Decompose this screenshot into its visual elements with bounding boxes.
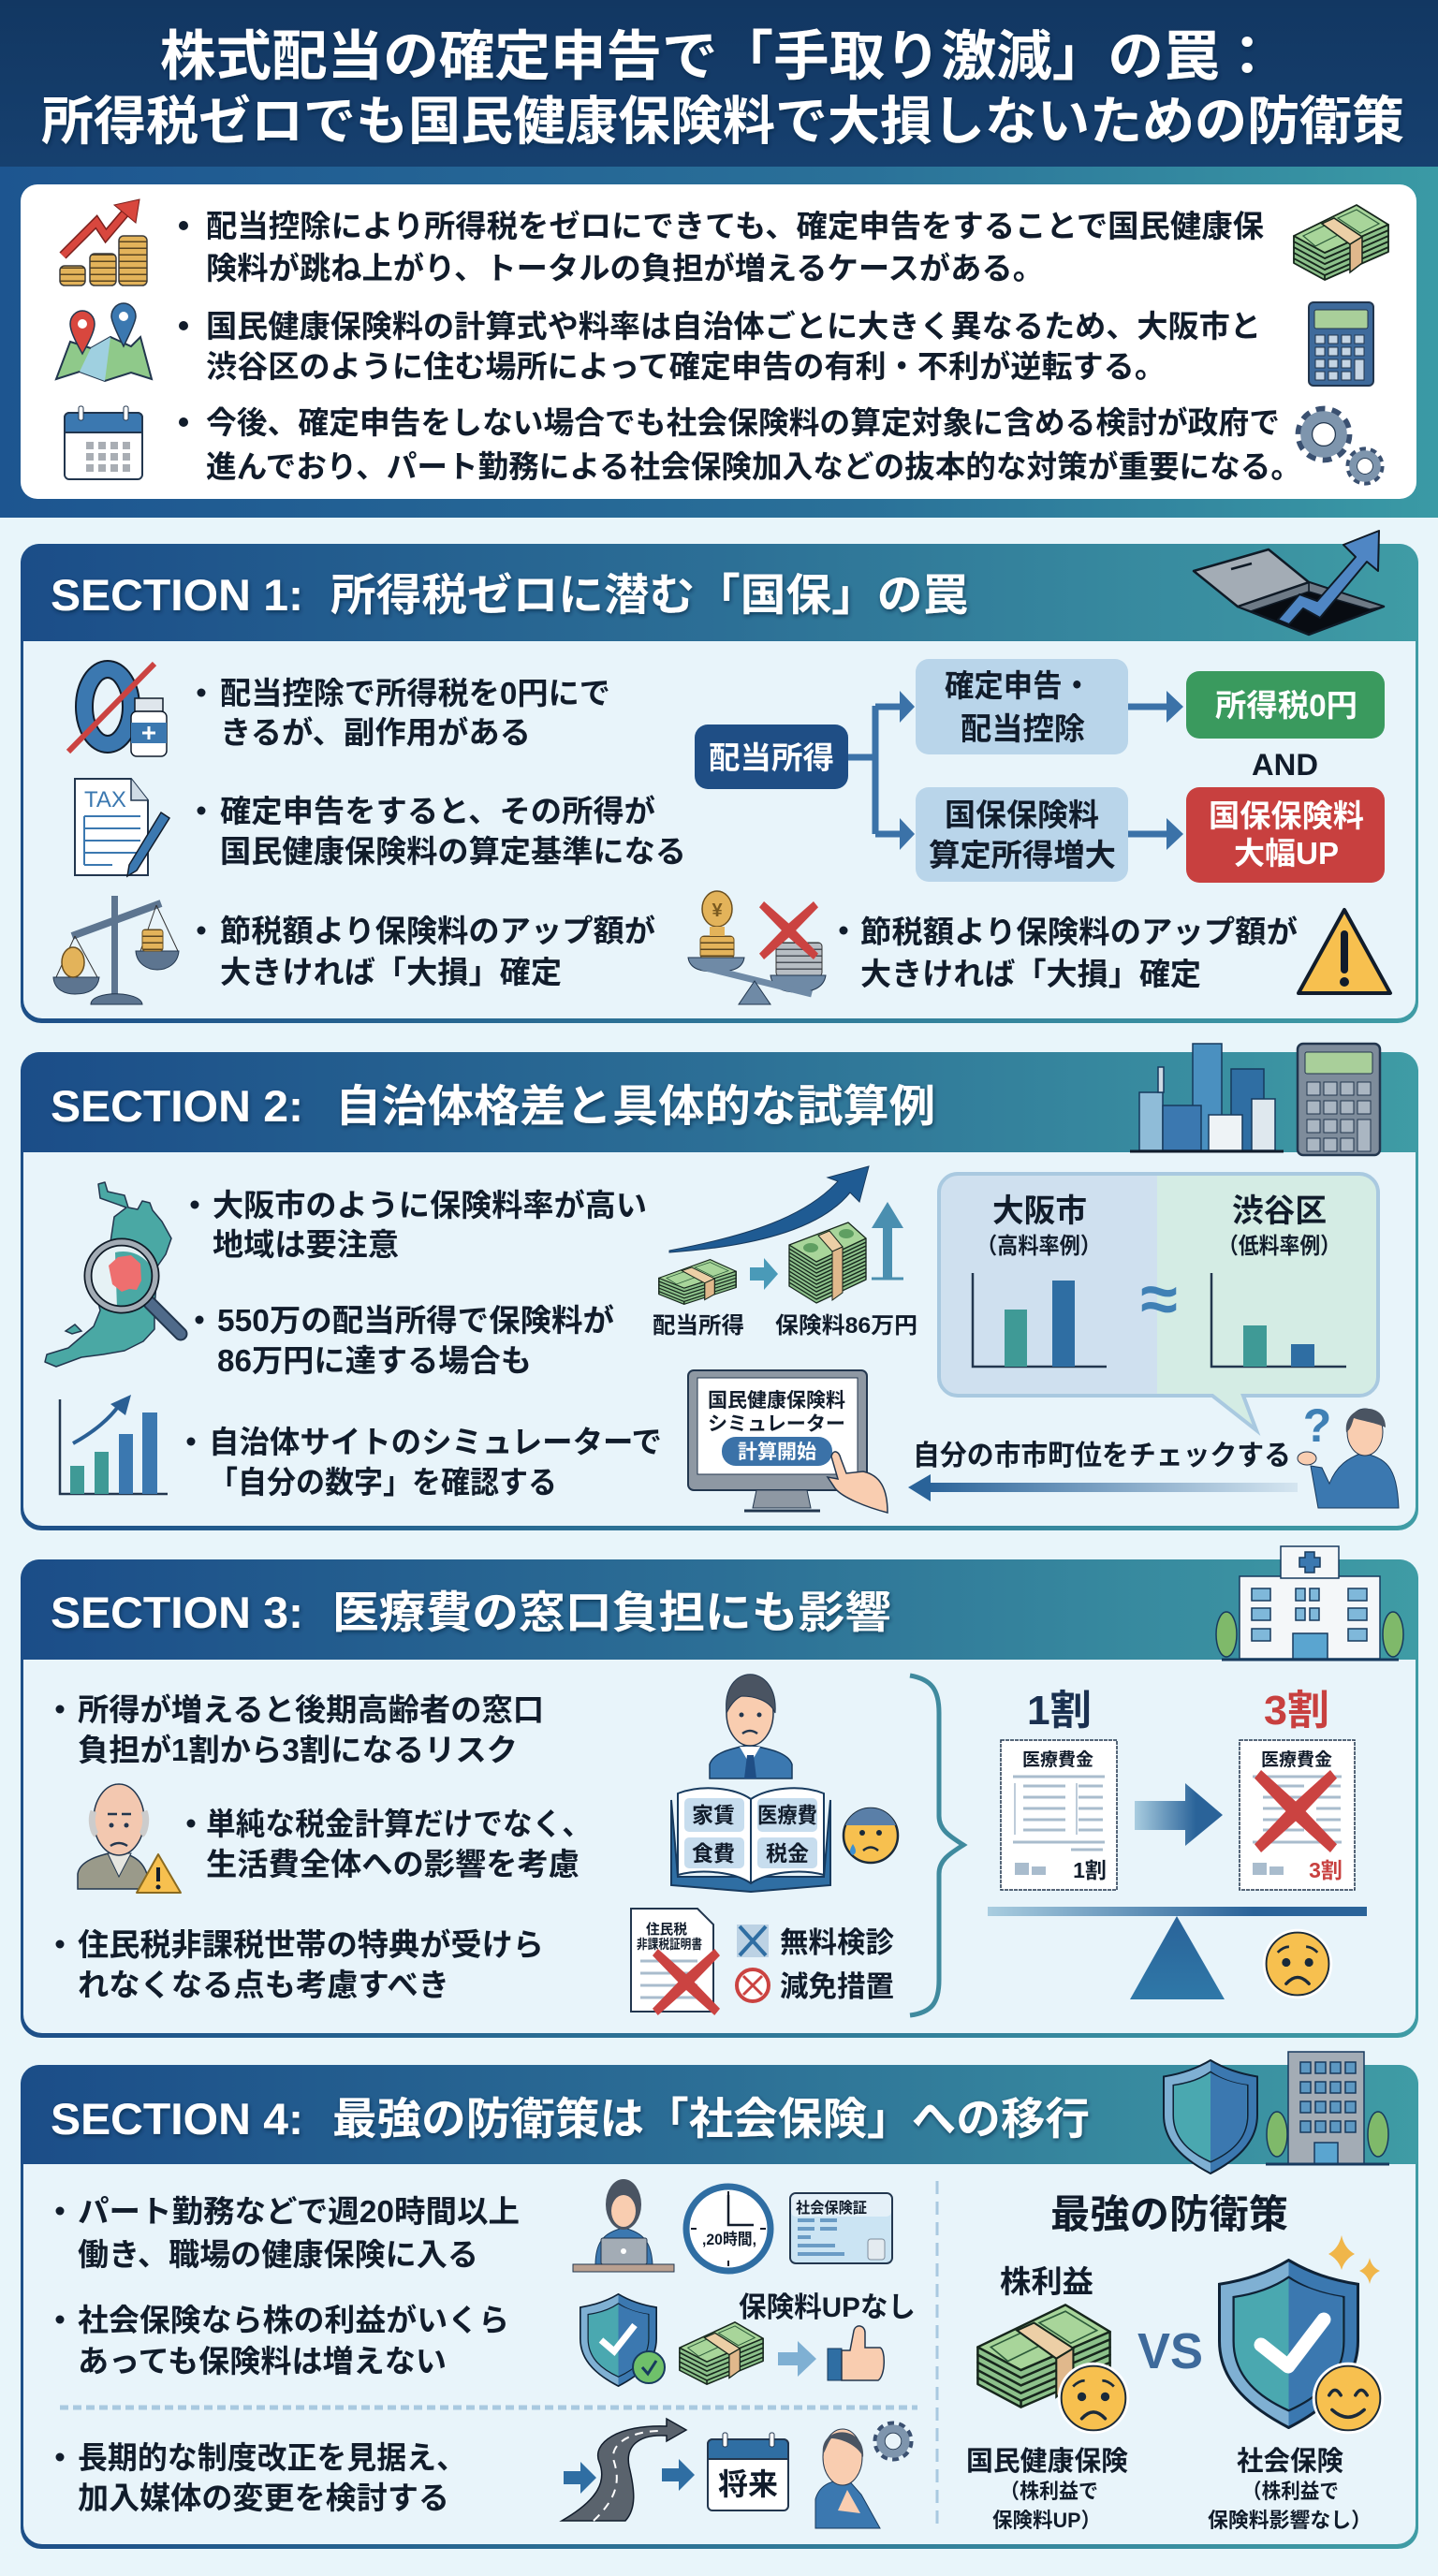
icon: simulator monitor bbox=[688, 1370, 888, 1513]
receipt: 10 percent: 1割 bbox=[1073, 1858, 1107, 1882]
bullets: section 3: れなくなる点も考慮すべき bbox=[78, 1968, 449, 2002]
icon: thinking person with gear bbox=[815, 2424, 910, 2528]
icon: big shield with happy face bbox=[1220, 2261, 1384, 2434]
icon: bar chart with arrow bbox=[60, 1395, 168, 1494]
flow box: dividend income bbox=[695, 724, 848, 789]
icon: person with question mark bbox=[1298, 1399, 1399, 1508]
section 4 header: 最強の防衛策は「社会保険」への移行 bbox=[332, 2094, 1090, 2144]
bullets: section 2: 自治体サイトのシミュレーターで bbox=[209, 1425, 662, 1459]
small money bbox=[659, 1260, 736, 1304]
icon: tax document bbox=[75, 779, 169, 876]
caption: social insurance bbox=[1208, 2446, 1372, 2532]
bullets: section 2: 86万円に達する場合も bbox=[217, 1343, 532, 1378]
bullets: section 1 left: 配当控除で所得税を0円にで bbox=[220, 676, 610, 710]
icon: clock 20 hours bbox=[686, 2187, 770, 2271]
label: 30 percent: 3割 bbox=[1264, 1688, 1329, 1734]
bullets: section 4 left: あっても保険料は増えない bbox=[78, 2344, 447, 2378]
icon: money stack bbox=[1294, 205, 1388, 280]
icon: worried man in suit bbox=[710, 1675, 792, 1778]
icon: person with question mark: ? bbox=[1303, 1399, 1331, 1452]
flow box: assessed income increase bbox=[916, 787, 1128, 882]
bullets: section 1 left: 節税額より保険料のアップ額が bbox=[220, 914, 655, 948]
arrow: no premium rise bbox=[778, 2341, 816, 2377]
summary bullets: 進んでおり、パート勤務による社会保険加入などの抜本的な対策が重要になる。 bbox=[206, 449, 1301, 484]
panel: section 2 bbox=[21, 1044, 1418, 1530]
flow box: income tax zero: 所得税0円 bbox=[1215, 688, 1357, 723]
Osaka heading: （高料率例） bbox=[976, 1234, 1101, 1259]
Osaka bar chart bbox=[973, 1273, 1107, 1367]
icon: sad face bbox=[1263, 1929, 1332, 1998]
bullets: section 4 left: 社会保険なら株の利益がいくら bbox=[78, 2303, 509, 2337]
brace connector bbox=[910, 1676, 963, 2015]
icon: household budget book: 食費 bbox=[692, 1841, 735, 1866]
bullets: section 1 left: 大きければ「大損」確定 bbox=[220, 955, 562, 989]
icon: non-taxable certificate crossed out: 非課税証明書 bbox=[637, 1937, 702, 1952]
icon: winding road bbox=[562, 2419, 686, 2521]
icon: non-taxable certificate crossed out bbox=[631, 1909, 720, 2015]
icon: map with magnifier bbox=[45, 1182, 181, 1367]
caption: social insurance: 社会保険 bbox=[1237, 2446, 1343, 2477]
flow box: assessed income increase: 国保保険料 bbox=[945, 798, 1099, 832]
title banner: 株式配当の確定申告で「手取り激減」の罠： bbox=[160, 26, 1275, 87]
caption: social insurance: 保険料影響なし） bbox=[1208, 2509, 1372, 2532]
caption: national health insurance: 国民健康保険 bbox=[966, 2446, 1128, 2477]
bullets: section 2: 「自分の数字」を確認する bbox=[209, 1465, 557, 1500]
icon: gears bbox=[1299, 410, 1382, 483]
section 3 header bbox=[21, 1559, 1418, 1660]
summary bullets: 渋谷区のように住む場所によって確定申告の有利・不利が逆転する。 bbox=[206, 349, 1166, 384]
check your municipality label: 自分の市市町位をチェックする bbox=[913, 1441, 1291, 1471]
label: 10 percent: 1割 bbox=[1027, 1688, 1092, 1734]
no reduction item: 減免措置 bbox=[780, 1970, 894, 2003]
icon: anxious face bbox=[844, 1808, 898, 1863]
section 4 header: SECTION 4: bbox=[51, 2094, 303, 2144]
icon: simulator monitor: 国民健康保険料 bbox=[708, 1390, 845, 1412]
title banner bbox=[0, 0, 1438, 167]
flow box: premium up bbox=[1186, 787, 1385, 883]
summary bullets: 今後、確定申告をしない場合でも社会保険料の算定対象に含める検討が政府で bbox=[206, 405, 1280, 440]
label: VS: VS bbox=[1137, 2323, 1203, 2379]
arrow to simulator bbox=[908, 1474, 1298, 1501]
bullets: section 1 left: きるが、副作用がある bbox=[220, 715, 531, 750]
caption: national health insurance: 保険料UP） bbox=[992, 2509, 1101, 2532]
bullets: section 4 left: 働き、職場の健康保険に入る bbox=[78, 2237, 478, 2272]
arrows around road bbox=[564, 2459, 695, 2494]
icon: hospital bbox=[1216, 1546, 1403, 1660]
section 1 header: SECTION 1: bbox=[51, 570, 303, 620]
icon: future calendar bbox=[708, 2433, 788, 2510]
icon: large calculator bbox=[1298, 1044, 1380, 1155]
Shibuya heading: （低料率例） bbox=[1218, 1234, 1341, 1259]
icon: map with pins bbox=[56, 303, 152, 381]
flow box: assessed income increase: 算定所得増大 bbox=[929, 838, 1116, 872]
bullets: section 3: 住民税非課税世帯の特典が受けら bbox=[78, 1927, 544, 1962]
icon: social insurance card bbox=[790, 2193, 892, 2263]
flow box: premium up: 大幅UP bbox=[1234, 836, 1339, 871]
panel: section 4 bbox=[21, 2052, 1418, 2549]
bullet: section 1 right: 大きければ「大損」確定 bbox=[860, 957, 1201, 991]
no free checkup item bbox=[737, 1925, 894, 1959]
small arrow bbox=[750, 1258, 778, 1290]
summary bullets bbox=[179, 209, 1301, 484]
bullets: section 2: 地域は要注意 bbox=[213, 1227, 399, 1262]
section 3 header: 医療費の窓口負担にも影響 bbox=[332, 1588, 891, 1637]
section 4 header bbox=[21, 2065, 1418, 2164]
icon: tax document: TAX bbox=[84, 787, 126, 812]
flow box: income tax zero bbox=[1186, 671, 1385, 739]
caption: national health insurance bbox=[966, 2446, 1128, 2532]
simulator button bbox=[722, 1437, 832, 1466]
icon: shield with check bbox=[580, 2294, 665, 2386]
receipt: 10 percent bbox=[1001, 1740, 1117, 1890]
bullet: section 1 right: 節税額より保険料のアップ額が bbox=[860, 915, 1298, 949]
icon: household budget book: 医療費 bbox=[757, 1803, 817, 1827]
bullets: section 1 left bbox=[197, 676, 686, 989]
icon: balance scale with coins bbox=[53, 896, 179, 1004]
icon: city skyline bbox=[1130, 1044, 1284, 1151]
flow box: dividend income: 配当所得 bbox=[709, 740, 834, 775]
icon: elderly man with warning bbox=[78, 1784, 181, 1893]
flow chart: dividend income outcomes bbox=[695, 659, 1385, 883]
section 1 header: 所得税ゼロに潜む「国保」の罠 bbox=[330, 570, 968, 620]
icon: trapdoor and rising arrow bbox=[1194, 531, 1384, 635]
big rising arrow bbox=[669, 1166, 869, 1252]
icon: social insurance card: 社会保険証 bbox=[796, 2200, 867, 2217]
approx symbol: ≈ bbox=[1140, 1262, 1178, 1337]
label: stock profit: 株利益 bbox=[1000, 2264, 1093, 2299]
bullets: section 4 left: 加入媒体の変更を検討する bbox=[78, 2481, 449, 2515]
flow box: tax return bbox=[916, 659, 1128, 754]
section 2 header: 自治体格差と具体的な試算例 bbox=[335, 1081, 935, 1131]
right column heading: 最強の防衛策 bbox=[1050, 2192, 1288, 2236]
summary bullets: 険料が跳ね上がり、トータルの負担が増えるケースがある。 bbox=[206, 251, 1044, 285]
flow box: tax return: 配当控除 bbox=[961, 711, 1085, 746]
receipt: 30 percent crossed out: 医療費金 bbox=[1261, 1749, 1332, 1770]
money labels: 保険料86万円 bbox=[775, 1313, 917, 1339]
bullet: section 1 right bbox=[839, 915, 1298, 991]
icon: calendar bbox=[65, 406, 142, 479]
bullets: section 1 left: 国民健康保険料の算定基準になる bbox=[220, 834, 686, 869]
bullets: section 3 bbox=[56, 1692, 592, 2002]
bullets: section 3: 負担が1割から3割になるリスク bbox=[78, 1733, 518, 1767]
title banner: 所得税ゼロでも国民健康保険料で大損しないための防衛策 bbox=[41, 92, 1404, 151]
bullets: section 2: 大阪市のように保険料率が高い bbox=[213, 1188, 647, 1222]
panel: section 3 bbox=[21, 1546, 1418, 2038]
panel: section 1 bbox=[21, 531, 1418, 1023]
icon: warning triangle bbox=[1299, 910, 1390, 993]
big money bbox=[789, 1222, 866, 1303]
icon: header shield bbox=[1164, 2060, 1257, 2174]
arrow: 10 to 30 percent bbox=[1135, 1783, 1223, 1846]
caption: social insurance: （株利益で bbox=[1242, 2480, 1339, 2503]
flow connectors bbox=[848, 691, 1183, 850]
icon: household budget book bbox=[671, 1788, 830, 1892]
Shibuya heading: 渋谷区 bbox=[1232, 1193, 1327, 1229]
Osaka heading: 大阪市 bbox=[992, 1193, 1087, 1229]
Shibuya heading bbox=[1218, 1193, 1341, 1259]
icon: non-taxable certificate crossed out: 住民税 bbox=[646, 1921, 687, 1938]
no free checkup item: 無料検診 bbox=[780, 1926, 894, 1959]
icon: household budget book: 家賃 bbox=[692, 1803, 735, 1827]
bullets: section 3: 生活費全体への影響を考慮 bbox=[206, 1847, 580, 1881]
money labels bbox=[653, 1313, 917, 1339]
receipt: 30 percent crossed out: 3割 bbox=[1309, 1858, 1343, 1882]
icon: future calendar: 将来 bbox=[718, 2467, 778, 2501]
flow box: tax return: 確定申告・ bbox=[945, 668, 1092, 703]
icon: woman at laptop bbox=[573, 2179, 674, 2272]
icon: money stack small bbox=[680, 2322, 763, 2384]
seesaw balance bbox=[988, 1907, 1367, 1999]
icon: sparkles bbox=[1328, 2235, 1380, 2284]
icon: big money stack with sad face bbox=[977, 2305, 1129, 2434]
summary bullets: 国民健康保険料の計算式や料率は自治体ごとに大きく異なるため、大阪市と bbox=[206, 309, 1261, 344]
icon: simulator monitor: シミュレーター bbox=[708, 1413, 845, 1435]
caption: national health insurance: （株利益で bbox=[1000, 2480, 1098, 2503]
bullets: section 3: 所得が増えると後期高齢者の窓口 bbox=[78, 1692, 544, 1727]
up arrow bbox=[872, 1202, 903, 1279]
panel: summary bbox=[0, 167, 1438, 518]
Shibuya bar chart bbox=[1211, 1273, 1346, 1367]
Osaka heading bbox=[976, 1193, 1101, 1259]
no reduction item bbox=[737, 1969, 894, 2003]
icon: pointing hand bbox=[828, 1452, 888, 1513]
section 1 header bbox=[21, 544, 1418, 641]
bullets: section 1 left: 確定申告をすると、その所得が bbox=[220, 794, 655, 828]
flow box: premium up: 国保保険料 bbox=[1209, 798, 1364, 833]
section 2 header bbox=[21, 1052, 1418, 1152]
bullets: section 2: 550万の配当所得で保険料が bbox=[217, 1303, 614, 1338]
bullets: section 4 left: 長期的な制度改正を見据え、 bbox=[78, 2440, 466, 2475]
receipt: 30 percent crossed out bbox=[1240, 1740, 1355, 1890]
label: AND: AND bbox=[1252, 748, 1318, 782]
section 2 header: SECTION 2: bbox=[51, 1081, 303, 1131]
icon: rising arrow and coins bbox=[60, 199, 147, 285]
simulator button: 計算開始 bbox=[738, 1442, 816, 1463]
bullets: section 2 bbox=[187, 1188, 662, 1500]
icon: calculator bbox=[1309, 302, 1373, 386]
icon: office building bbox=[1266, 2052, 1389, 2164]
comparison bubble bbox=[939, 1174, 1378, 1430]
icon: household budget book: 税金 bbox=[766, 1841, 809, 1866]
section 3 header: SECTION 3: bbox=[51, 1588, 303, 1637]
icon: tilted scale with red cross bbox=[688, 891, 826, 1004]
bullets: section 3: 単純な税金計算だけでなく、 bbox=[206, 1807, 592, 1841]
icon: crossed-out zero and medicine bottle bbox=[68, 664, 167, 756]
bullets: section 4 left bbox=[56, 2194, 520, 2515]
icon: clock 20 hours: ,20時間, bbox=[702, 2231, 756, 2248]
summary bullets: 配当控除により所得税をゼロにできても、確定申告をすることで国民健康保 bbox=[206, 209, 1264, 243]
label: no premium up: 保険料UPなし bbox=[739, 2292, 916, 2323]
receipt: 10 percent: 医療費金 bbox=[1022, 1749, 1093, 1770]
bullets: section 4 left: パート勤務などで週20時間以上 bbox=[78, 2194, 520, 2229]
growth illustration: money to premium bbox=[653, 1166, 917, 1339]
icon: thumbs up bbox=[828, 2326, 884, 2380]
icon: tilted scale with red cross: ¥ bbox=[712, 900, 723, 921]
money labels: 配当所得 bbox=[653, 1313, 744, 1339]
